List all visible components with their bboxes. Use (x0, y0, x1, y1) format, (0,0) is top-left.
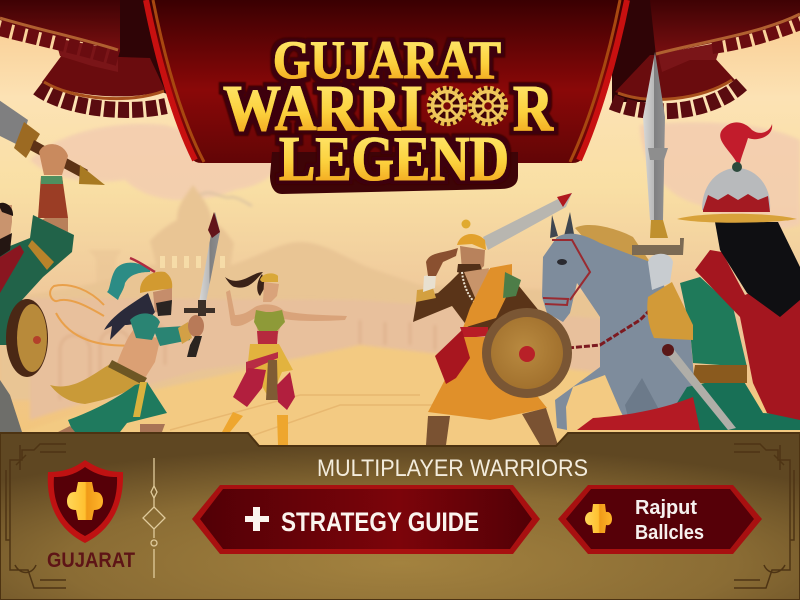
ornamental divider (143, 458, 165, 578)
icon: gold cross (585, 504, 612, 533)
emblem label: GUJARAT (47, 549, 135, 572)
button: strategy guide (192, 485, 540, 554)
background temple and hills (0, 185, 690, 400)
warrior: far left with raised sword (0, 98, 105, 432)
warrior: orange robed with sword and shield (413, 193, 572, 445)
left curtain (0, 0, 170, 110)
icon: plus (245, 507, 269, 531)
title banner (143, 0, 630, 163)
warrior: teal plume with sword (50, 212, 220, 432)
fort wall (30, 298, 620, 420)
gears replacing the letters O (428, 83, 507, 130)
right curtain (612, 0, 800, 111)
ground (0, 345, 800, 445)
corner ornaments (6, 444, 794, 588)
subtitle: MULTIPLAYER WARRIORS (317, 455, 588, 482)
background clouds (30, 122, 800, 229)
button: rajput battles (558, 485, 762, 554)
horse (542, 212, 695, 430)
button label (635, 497, 704, 544)
title text: GUJARAT (273, 30, 501, 90)
temple columns (160, 256, 225, 268)
background sky (0, 0, 800, 445)
shield of orange warrior (482, 308, 572, 398)
shield emblem (48, 460, 123, 543)
legend plate and word: LEGEND (279, 123, 509, 194)
title text (223, 30, 554, 145)
gears replacing the letters O: O (431, 83, 463, 130)
warrior: woman pointing (222, 272, 347, 445)
title text: WARRI (223, 72, 423, 145)
button: strategy guide: STRATEGY GUIDE (281, 507, 479, 537)
warrior: rider with hat and sword (577, 52, 800, 430)
gears replacing the letters O: O (472, 83, 504, 130)
button label: Ballcles (635, 522, 704, 544)
title text: R (513, 72, 554, 145)
button label: Rajput (635, 497, 697, 519)
bottom panel (0, 433, 800, 600)
